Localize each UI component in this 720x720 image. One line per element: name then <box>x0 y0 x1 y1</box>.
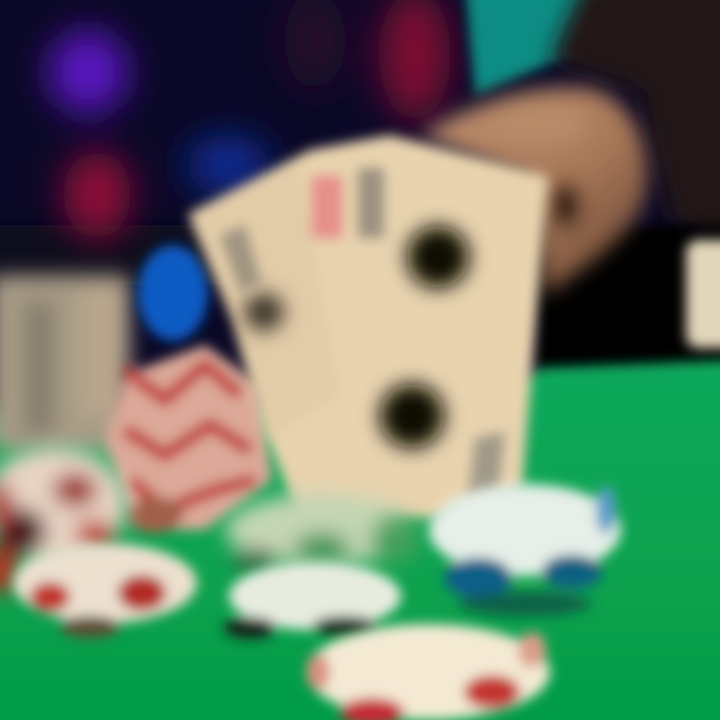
card pip: lower spade <box>380 384 444 448</box>
card index: grey corner mark <box>358 168 384 238</box>
background: black area behind the hand <box>535 225 720 370</box>
card index: left corner mark <box>220 225 262 292</box>
chip: blue top chip <box>138 245 208 341</box>
chip: black and white centre front chip <box>224 562 401 639</box>
card pip: upper spade <box>407 226 469 288</box>
background: dark sleeve <box>550 0 720 250</box>
card index: lower right mark <box>468 432 505 505</box>
background: teal panel <box>465 0 640 95</box>
cards: fan of playing cards <box>188 135 548 520</box>
card pip: small spade <box>244 293 284 331</box>
chip stack: red and white left stack <box>0 447 127 594</box>
chip stack: green and white centre chips <box>225 494 419 571</box>
chip stack: blue and white right chips <box>429 484 621 616</box>
table: green felt <box>0 360 720 720</box>
hand <box>420 87 648 295</box>
chip stack: pink and red centre stack <box>105 345 272 533</box>
chip: large red and white front chip <box>306 624 550 720</box>
card index: red corner mark <box>312 176 342 238</box>
background lights <box>48 0 451 239</box>
object: white item at right edge <box>686 240 720 348</box>
chip stack: beige left stack <box>0 275 130 450</box>
chip: red and white front left chip <box>13 543 197 638</box>
